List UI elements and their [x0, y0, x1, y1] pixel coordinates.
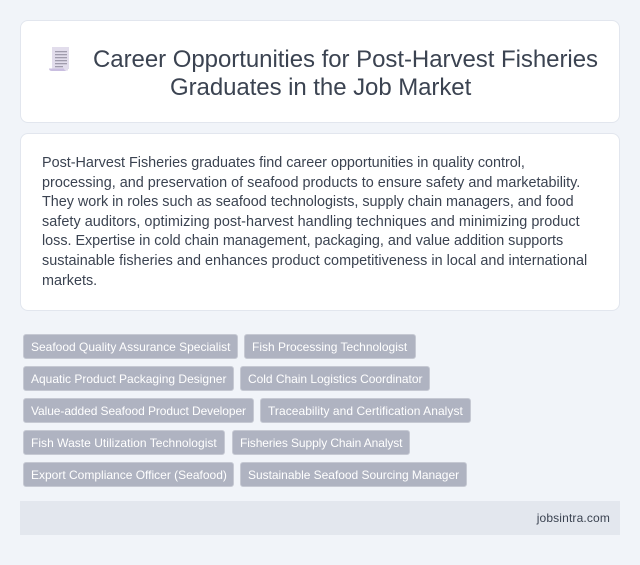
icon: document scroll: [49, 47, 69, 71]
tag: [240, 366, 430, 391]
title: [93, 46, 598, 101]
title: Graduates in the Job Market: [170, 74, 471, 101]
description text: loss. Expertise in cold chain management, packaging, and value addition supports: [42, 233, 563, 249]
footer bar: [20, 501, 620, 535]
description text: [42, 155, 587, 289]
footer source text: jobsintra.com: [537, 511, 610, 525]
tag: Sustainable Seafood Sourcing Manager: [248, 468, 459, 482]
description text: markets.: [42, 273, 97, 289]
tag: [23, 462, 234, 487]
tag: [232, 430, 410, 455]
description text: They work in roles such as seafood technologists, supply chain managers, and food: [42, 194, 574, 210]
tag: [23, 366, 234, 391]
job role tags: [23, 334, 471, 487]
description text: sustainable fisheries and enhances product competitiveness in local and international: [42, 253, 587, 269]
tag: Fish Waste Utilization Technologist: [31, 436, 217, 450]
tag: Fisheries Supply Chain Analyst: [240, 436, 402, 450]
description text: Post-Harvest Fisheries graduates find career opportunities in quality control,: [42, 155, 525, 171]
description text: processing, and preservation of seafood products to ensure safety and marketability.: [42, 175, 580, 191]
tag: Export Compliance Officer (Seafood): [31, 468, 227, 482]
tag: Aquatic Product Packaging Designer: [31, 372, 226, 386]
header panel: [20, 20, 620, 123]
tag: [244, 334, 416, 359]
description panel: [20, 133, 620, 311]
tag: Traceability and Certification Analyst: [268, 404, 463, 418]
tag: [23, 334, 238, 359]
tag: [23, 430, 225, 455]
tag: [23, 398, 254, 423]
title: Career Opportunities for Post-Harvest Fisheries: [93, 46, 598, 73]
tag: Cold Chain Logistics Coordinator: [248, 372, 422, 386]
description text: safety auditors, optimizing post-harvest handling techniques and minimizing product: [42, 214, 580, 230]
tag: [260, 398, 471, 423]
tag: [240, 462, 467, 487]
tag: Value-added Seafood Product Developer: [31, 404, 246, 418]
tag: Seafood Quality Assurance Specialist: [31, 340, 230, 354]
tag: Fish Processing Technologist: [252, 340, 407, 354]
